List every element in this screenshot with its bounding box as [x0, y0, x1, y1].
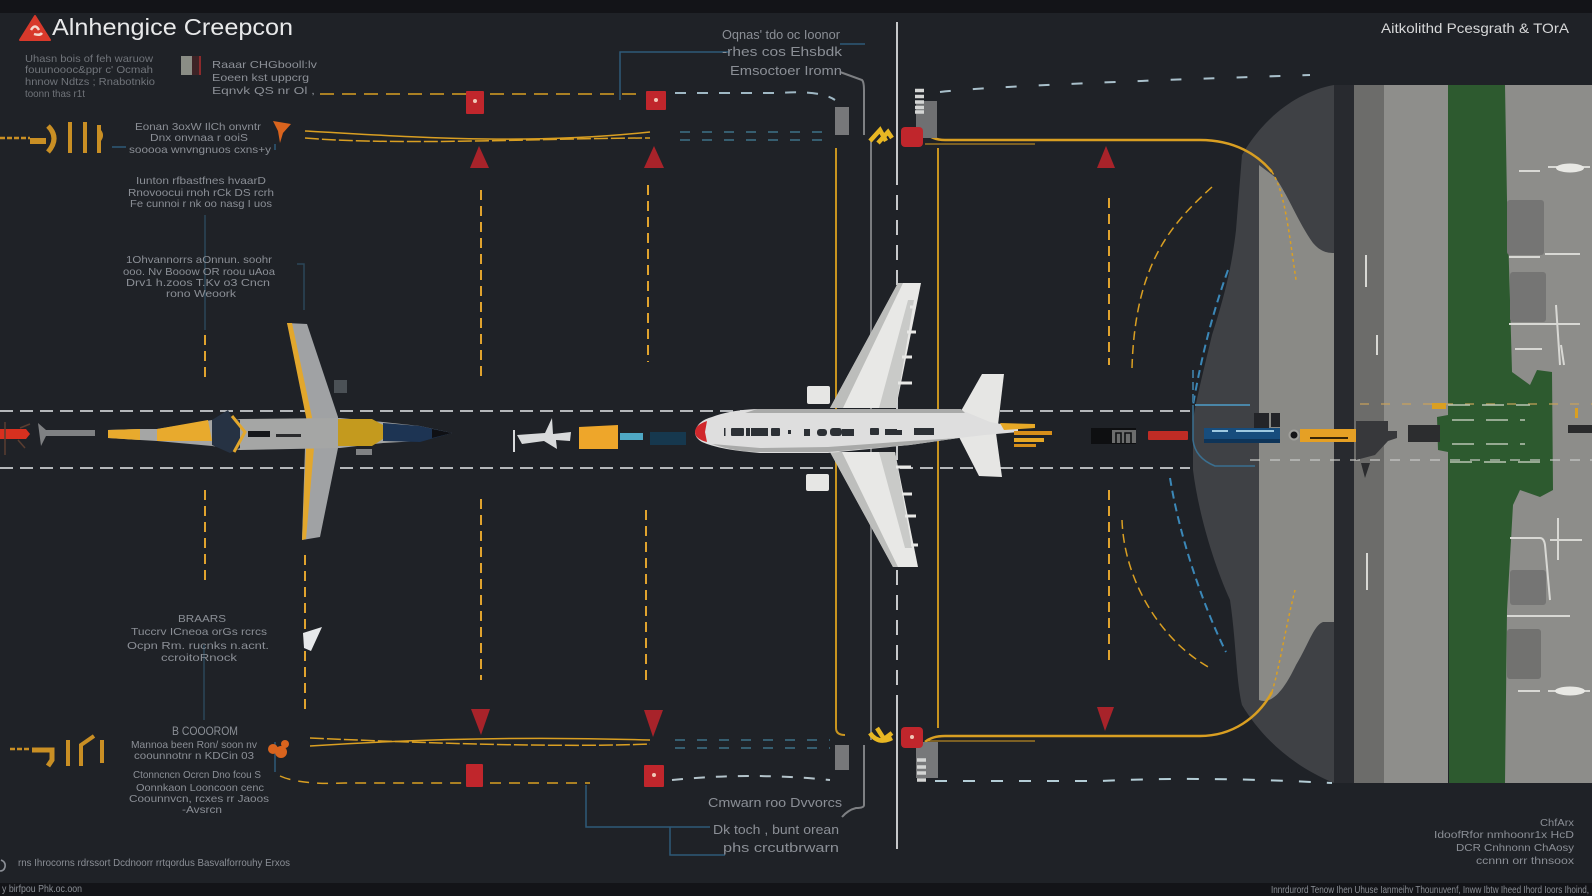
small red vehicle far left	[0, 422, 30, 455]
windows	[724, 428, 934, 436]
text block: legend note	[212, 59, 318, 97]
lower wing	[302, 448, 338, 540]
main white airliner	[695, 283, 1018, 567]
red triangle markers	[470, 146, 1115, 737]
bottom bar	[0, 883, 1592, 896]
text block: lower note	[127, 613, 269, 664]
text block: upper key: sooooa wnvngnuos cxns+y	[129, 144, 272, 156]
bottom centre text: Dk toch , bunt orean	[713, 822, 839, 837]
curved taxi route: yellow	[280, 94, 1296, 783]
text block: upper note	[128, 175, 274, 210]
grey pin vehicle	[38, 423, 95, 446]
title: Alnhengice Creepcon	[52, 14, 293, 40]
vertical guide lines	[204, 22, 1109, 849]
black equipment box	[1091, 428, 1136, 444]
text block: upper key: Eonan 3oxW IlCh onvntr	[135, 121, 262, 133]
text block: lower key: Coounnvcn, rcxes rr Jaoos	[129, 793, 269, 805]
green strip	[1437, 85, 1553, 783]
text block: middle note: rono Weoork	[166, 288, 237, 300]
fuselage	[695, 409, 1018, 453]
runway and apron area	[1193, 85, 1592, 783]
yellow junction markers	[870, 130, 892, 741]
text block: lower key: B COOOROM	[172, 724, 238, 738]
blue vehicle	[1204, 428, 1280, 443]
top centre text: -rhes cos Ehsbdk	[722, 44, 843, 59]
text block: legend note: Raaar CHGbooll:lv	[212, 59, 318, 71]
gate blocks	[835, 90, 938, 780]
orange flags	[268, 121, 291, 758]
black pivot circle	[1290, 430, 1298, 440]
red vehicle	[1148, 431, 1188, 440]
footer note: rns Ihrocorns rdrssort Dcdnoorr rrtqordus Basvalforrouhy Erxos	[18, 857, 290, 869]
top centre text: Oqnas' tdo oc Ioonor	[722, 27, 841, 42]
text block: upper note: Fe cunnoi r nk oo nasg I uos	[130, 198, 272, 210]
darker apron patches	[1507, 200, 1544, 255]
green strip white dashes	[1448, 405, 1550, 462]
top bar	[0, 0, 1592, 13]
small white pennant	[303, 627, 322, 651]
text block: upper key	[129, 121, 272, 156]
text block: legend note: Eqnvk QS nr Ol ,	[212, 85, 315, 97]
bottom right note: IdoofRfor nmhoonr1x HcD	[1434, 829, 1574, 841]
yellow vehicle	[1300, 429, 1356, 442]
text block: lower key: -Avsrcn	[182, 804, 222, 816]
dark apron shoulder	[1193, 85, 1334, 783]
grey leader curves	[840, 72, 864, 817]
horizontal taxiway lines	[0, 404, 1592, 468]
lower wing	[830, 452, 918, 567]
small white aircraft	[513, 418, 571, 452]
text block: middle note: ooo. Nv Booow OR roou uAoa	[123, 266, 275, 278]
dark blue tow link	[650, 432, 686, 445]
text block: intro: fouunoooc&ppr c' Ocmah	[25, 64, 153, 76]
dark aircraft silhouette	[1356, 421, 1592, 478]
text block: intro: Uhasn bois of feh waruow	[25, 53, 153, 65]
icon: key row top	[0, 122, 102, 153]
text block: lower key: coounnotnr n KDCin 03	[134, 750, 254, 762]
yellow tail equipment	[1000, 423, 1052, 447]
text block: intro: hnnow Ndtzs ; Rnabotnkio	[25, 76, 155, 88]
text block: lower key: Oonnkaon Looncoon cenc	[136, 782, 264, 794]
bottom right note	[1434, 817, 1575, 867]
bottom right note: ccnnn orr thnsoox	[1476, 855, 1575, 867]
text block: lower note: Tuccrv ICneoa orGs rcrcs	[131, 626, 267, 638]
tail fins	[961, 374, 1004, 425]
red nose	[695, 421, 707, 442]
top centre text	[722, 27, 843, 78]
curved taxi route: blue and white dashes	[672, 75, 1332, 783]
text block: upper note: Iunton rfbastfnes hvaarD	[136, 175, 266, 187]
flap tabs	[896, 307, 918, 545]
light pavement	[1259, 165, 1334, 701]
text block: intro: toonn thas r1t	[25, 88, 85, 100]
text block: lower key: Ctonncncn Ocrcn Dno fcou S	[133, 769, 261, 781]
gravel and paved strips	[1354, 85, 1384, 783]
text block: lower key: Mannoa been Ron/ soon nv	[131, 739, 258, 751]
dark runway crossing strip	[1334, 85, 1354, 783]
text block: middle note: Drv1 h.zoos T.Kv o3 Cncn	[126, 277, 270, 289]
cyan tow bar	[620, 433, 643, 440]
bottom centre text: Cmwarn roo Dvvorcs	[708, 795, 843, 810]
leader lines	[112, 44, 865, 855]
red square markers	[466, 91, 923, 787]
small legend icon	[181, 56, 201, 75]
text block: middle note	[123, 254, 275, 300]
icon: title logo	[20, 16, 50, 40]
dark blocks behind blue vehicle	[1254, 413, 1280, 428]
text block: upper note: Rnovoocui rnoh rCk DS rcrh	[128, 187, 274, 199]
text block: lower key	[129, 724, 269, 816]
text block: upper key: Dnx onvnaa r ooiS	[150, 132, 248, 144]
bottom right note: ChfArx	[1540, 817, 1575, 829]
top centre text: Emsoctoer Iromn	[730, 63, 842, 78]
text block: lower note: Ocpn Rm. rucnks n.acnt.	[127, 640, 269, 652]
left aircraft: yellow and grey	[108, 323, 452, 540]
text block: lower note: BRAARS	[178, 613, 226, 625]
yellow marks on strip	[1432, 403, 1578, 418]
upper wing	[830, 283, 921, 408]
white markings	[1366, 167, 1590, 691]
upper wing	[287, 323, 338, 425]
top right heading: Aitkolithd Pcesgrath & TOrA	[1381, 20, 1570, 36]
icon: key row bottom	[10, 736, 102, 766]
text block: middle note: 1Ohvannorrs aOnnun. soohr	[126, 254, 273, 266]
bottom centre text	[708, 795, 843, 855]
orange tug	[579, 425, 618, 449]
bottom bar: y birfpou Phk.oc.oon	[2, 883, 82, 895]
bottom centre text: phs crcutbrwarn	[723, 840, 839, 855]
fuselage	[108, 418, 452, 450]
engines	[807, 386, 830, 404]
bottom right note: DCR Cnhnonn ChAosy	[1456, 842, 1575, 854]
text block: intro	[25, 53, 155, 100]
text block: lower note: ccroitoRnock	[161, 652, 238, 664]
text block: legend note: Eoeen kst uppcrg	[212, 72, 309, 84]
